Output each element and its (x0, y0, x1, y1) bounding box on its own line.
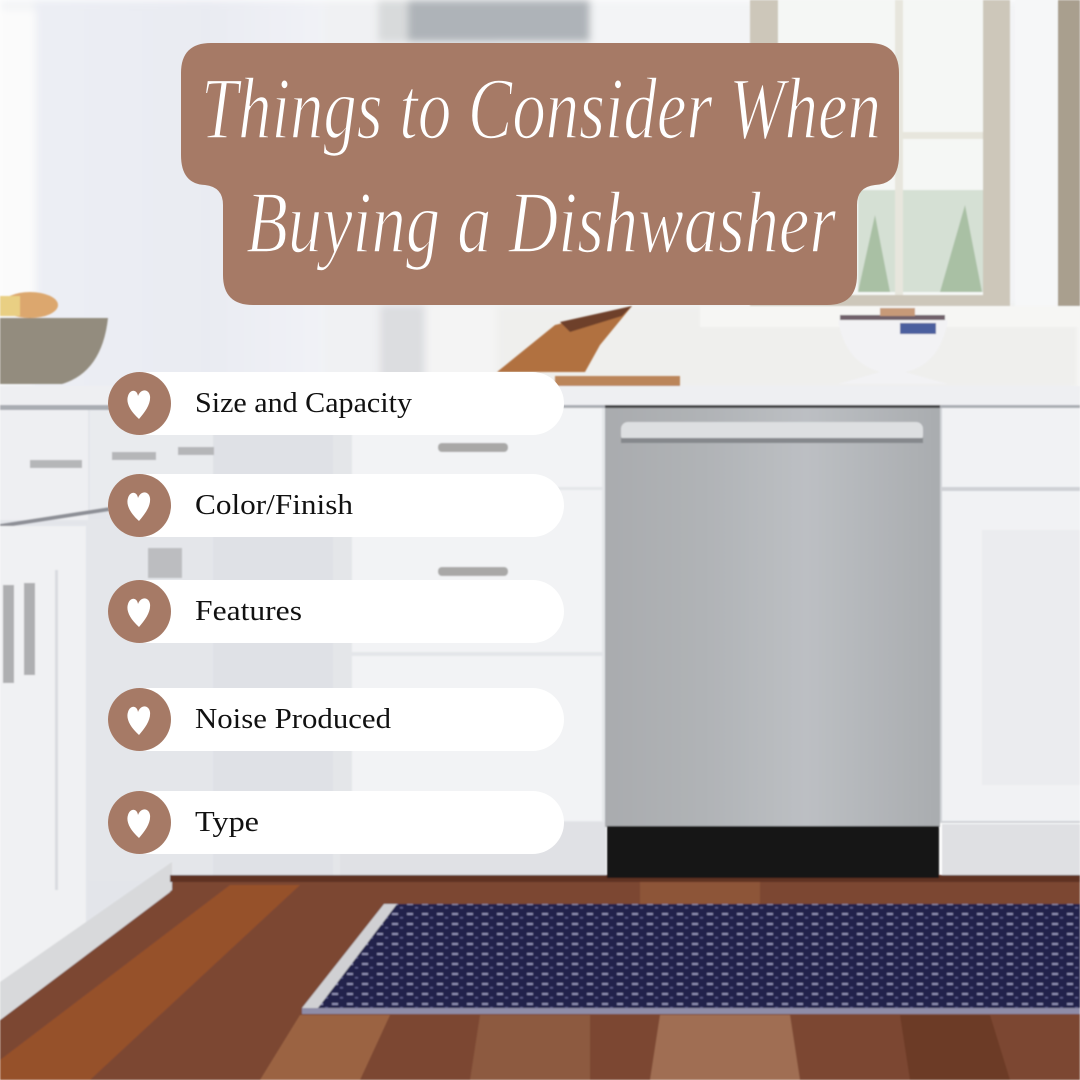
fruit bowl (2, 292, 58, 318)
floor (0, 878, 1080, 1080)
list item: Type (108, 791, 564, 854)
rug (302, 904, 1080, 1013)
list item: Size and Capacity (108, 372, 564, 435)
icon: heart (127, 390, 150, 419)
list item: Type: Type (195, 806, 259, 838)
list item: Color/Finish (108, 474, 564, 537)
list item: Features (108, 580, 564, 643)
icon: heart (127, 598, 150, 627)
title text: Buying a Dishwasher (246, 175, 837, 272)
list item: Features: Features (195, 595, 302, 627)
knife block (497, 306, 632, 372)
list item: Noise Produced: Noise Produced (195, 703, 392, 735)
list item: Size and Capacity: Size and Capacity (195, 387, 413, 419)
window (750, 0, 1010, 318)
icon: heart (127, 706, 150, 735)
title banner (181, 43, 899, 305)
title text: Things to Consider When (201, 61, 881, 158)
dishwasher (605, 407, 940, 827)
counter (0, 386, 1080, 406)
icon: heart (127, 492, 150, 521)
colander (838, 320, 948, 384)
list item: Noise Produced (108, 688, 564, 751)
title text (201, 61, 881, 272)
handles (438, 443, 508, 452)
icon: heart (127, 809, 150, 838)
list item: Color/Finish: Color/Finish (195, 489, 354, 521)
cabinets (0, 410, 335, 980)
